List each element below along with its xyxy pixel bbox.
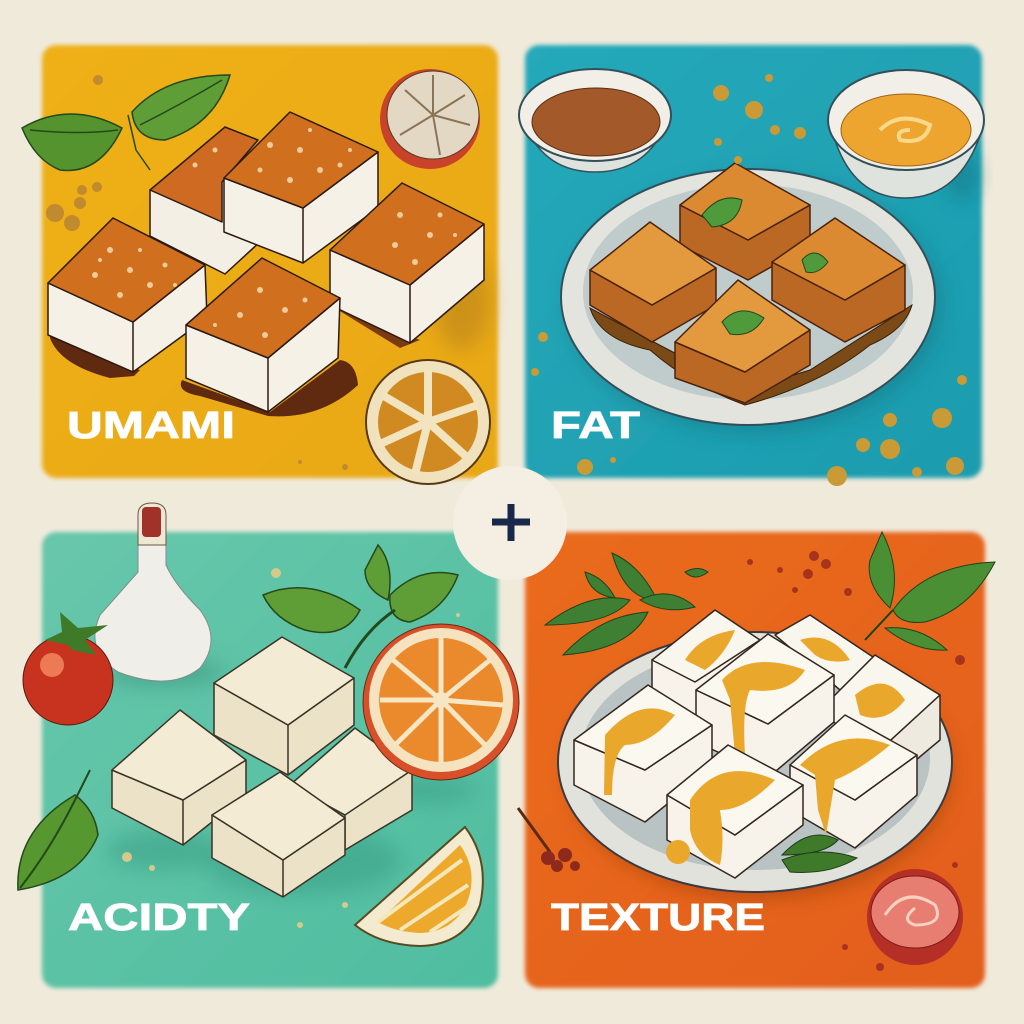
icon: brown sauce bowl bbox=[519, 69, 671, 172]
icon: herb on plate bbox=[782, 835, 857, 872]
panel: texture bbox=[518, 532, 995, 988]
panel: fat bbox=[519, 45, 984, 486]
icon: citrus top bbox=[380, 69, 480, 169]
icon: clove sprig bbox=[518, 808, 580, 872]
label: FAT: FAT bbox=[551, 405, 640, 447]
brown cube left bbox=[590, 222, 716, 342]
plate bbox=[561, 169, 942, 433]
icon: basil leaves top right bbox=[865, 532, 995, 650]
panel background yellow bbox=[42, 45, 498, 478]
label: ACIDTY: ACIDTY bbox=[68, 897, 250, 939]
seed dots bbox=[122, 568, 460, 928]
golden droplets bbox=[531, 74, 967, 486]
icon: yellow sauce bowl bbox=[828, 70, 984, 198]
tofu cube front center bbox=[186, 258, 340, 412]
brown cube front bbox=[675, 280, 810, 403]
icon: lemon wedge bbox=[355, 827, 483, 946]
cream cube back right bbox=[290, 728, 412, 850]
icon: tomato bbox=[23, 612, 113, 725]
icon: citrus bottom bbox=[366, 360, 490, 484]
plate bbox=[558, 632, 952, 897]
spice dots bbox=[46, 75, 348, 470]
label: TEXTURE: TEXTURE bbox=[551, 897, 765, 939]
tofu cube back center bbox=[224, 112, 378, 263]
panel: acidity bbox=[18, 503, 519, 988]
icon: tomato slice bbox=[867, 869, 963, 965]
brown cube right bbox=[772, 218, 905, 342]
sesame seeds bbox=[92, 128, 457, 338]
panel background teal bbox=[525, 45, 982, 478]
icon: basil leaves bbox=[22, 75, 230, 170]
white cube back right bbox=[775, 615, 873, 690]
tofu cube back left bbox=[150, 127, 262, 274]
label: UMAMI: UMAMI bbox=[67, 405, 235, 447]
white cube right bbox=[830, 655, 940, 790]
icon: basil leaves top left bbox=[545, 553, 708, 655]
icon: basil leaf left bbox=[18, 770, 98, 890]
white cube back left bbox=[652, 610, 760, 735]
tofu cube right bbox=[330, 183, 484, 343]
panel: umami bbox=[22, 45, 498, 484]
icon: basil sprig top bbox=[263, 545, 458, 668]
icon: white bottle bbox=[95, 503, 225, 688]
white cube center bbox=[696, 634, 834, 776]
cream cube top bbox=[214, 637, 354, 775]
white cube front right bbox=[790, 715, 917, 848]
bowl shadow bbox=[948, 150, 976, 200]
plus badge bbox=[453, 466, 567, 580]
white cube left bbox=[574, 685, 712, 822]
icon: herb garnishes bbox=[702, 198, 828, 335]
tofu cube front left bbox=[48, 218, 207, 372]
panel background green bbox=[42, 532, 498, 988]
icon: orange half bbox=[363, 624, 519, 780]
white cube front bbox=[666, 745, 803, 878]
cube shadows and sauce bbox=[50, 250, 490, 416]
brown cube top bbox=[680, 163, 810, 280]
spice dots bbox=[747, 551, 965, 971]
panel background orange bbox=[525, 532, 985, 988]
cream cube front bbox=[212, 772, 345, 897]
soft cube shadows bbox=[105, 776, 475, 895]
cream cube left bbox=[112, 710, 246, 845]
